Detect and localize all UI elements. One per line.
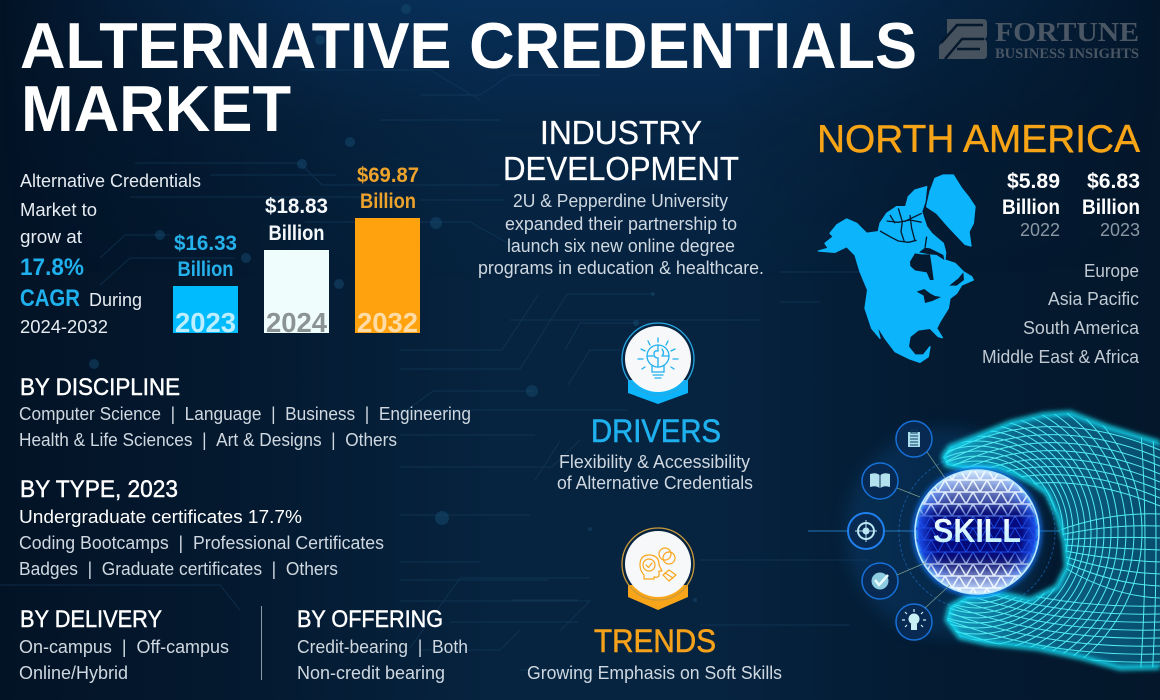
bar: 2032: Billion xyxy=(360,190,416,213)
icon: clipboard xyxy=(896,421,932,457)
trends text xyxy=(527,623,782,683)
logo: Fortune Business Insights: FORTUNE xyxy=(995,17,1139,47)
icon: check mark xyxy=(862,563,898,599)
drivers text: Flexibility & Accessibility xyxy=(559,452,750,472)
title: MARKET xyxy=(21,72,291,145)
industry development: launch six new online degree xyxy=(507,236,735,256)
skill sphere: SKILL xyxy=(933,512,1021,549)
map: North America xyxy=(818,175,975,362)
CAGR text block: During xyxy=(89,290,142,310)
bar: 2024: Billion xyxy=(268,222,324,245)
skill sphere xyxy=(912,467,1042,597)
industry development: 2U & Pepperdine University xyxy=(513,191,728,211)
North America values: 2023 xyxy=(1100,220,1140,240)
icon: target xyxy=(848,513,884,549)
industry development: DEVELOPMENT xyxy=(503,150,739,187)
CAGR text block: 17.8% xyxy=(20,254,84,281)
section: by type: Undergraduate certificates 17.7% xyxy=(19,507,302,527)
trends text: Growing Emphasis on Soft Skills xyxy=(527,663,782,683)
bar: 2032 xyxy=(355,164,420,338)
section: by discipline: Computer Science | Language | Business | Engineering xyxy=(19,404,471,424)
North America values: $6.83 xyxy=(1087,170,1140,193)
industry development xyxy=(478,114,764,278)
bar: 2023 xyxy=(173,232,238,338)
region heading: North America: NORTH AMERICA xyxy=(817,118,1140,161)
bar chart xyxy=(173,164,420,338)
other regions list: South America xyxy=(1023,318,1140,338)
bar: 2032: $69.87 xyxy=(357,164,419,187)
section: by delivery: Online/Hybrid xyxy=(19,663,128,683)
CAGR text block: CAGR xyxy=(20,285,80,312)
section: by discipline: BY DISCIPLINE xyxy=(20,374,180,401)
North America values: Billion xyxy=(1002,196,1060,219)
bar: 2024: 2024 xyxy=(266,307,327,338)
section: by offering: BY OFFERING xyxy=(297,606,443,633)
wireframe hand xyxy=(938,407,1160,674)
industry development: INDUSTRY xyxy=(540,114,702,151)
CAGR text block: Market to xyxy=(20,200,97,220)
title: ALTERNATIVE CREDENTIALS xyxy=(20,9,917,82)
section: by delivery: On-campus | Off-campus xyxy=(19,637,229,657)
North America values xyxy=(1002,170,1140,240)
title xyxy=(20,9,917,145)
icon: trends head badge xyxy=(622,528,694,610)
icon: drivers lightbulb badge xyxy=(622,323,694,404)
bar: 2023: 2023 xyxy=(175,307,236,338)
icon: idea bulb xyxy=(896,604,932,640)
CAGR text block: 2024-2032 xyxy=(20,317,108,337)
North America values: Billion xyxy=(1082,196,1140,219)
other regions list: Europe xyxy=(1084,261,1139,281)
illustration: wireframe hand holding skill sphere xyxy=(808,407,1160,674)
bar: 2024: $18.83 xyxy=(265,195,328,218)
bar: 2024 xyxy=(264,195,329,338)
North America values: 2022 xyxy=(1020,220,1060,240)
industry development: expanded their partnership to xyxy=(505,214,737,234)
CAGR text block: grow at xyxy=(20,227,82,247)
North America values: $5.89 xyxy=(1007,170,1060,193)
drivers text: of Alternative Credentials xyxy=(557,473,753,493)
CAGR text block xyxy=(20,171,201,337)
bar: 2023: $16.33 xyxy=(174,232,237,255)
section: by type: Coding Bootcamps | Professional Certificates xyxy=(19,533,384,553)
section: by type xyxy=(19,476,384,579)
section: by offering xyxy=(297,606,468,683)
bar: 2023: Billion xyxy=(178,258,234,281)
logo: Fortune Business Insights: BUSINESS INSIGHTS xyxy=(995,46,1139,62)
section: by discipline xyxy=(19,374,471,450)
section: by delivery: BY DELIVERY xyxy=(20,606,162,633)
section: by type: Badges | Graduate certificates | Others xyxy=(19,559,338,579)
other regions list xyxy=(982,261,1140,367)
drivers text xyxy=(557,413,753,493)
trends text: TRENDS xyxy=(594,623,716,659)
other regions list: Middle East & Africa xyxy=(982,347,1140,367)
bar: 2032: 2032 xyxy=(357,307,418,338)
drivers text: DRIVERS xyxy=(591,413,721,449)
CAGR text block: Alternative Credentials xyxy=(20,171,201,191)
section: by offering: Non-credit bearing xyxy=(297,663,445,683)
section: by discipline: Health & Life Sciences | Art & Designs | Others xyxy=(19,430,397,450)
section: by delivery xyxy=(19,606,229,683)
section: by type: BY TYPE, 2023 xyxy=(20,476,178,503)
icon: open book xyxy=(862,463,898,499)
logo: Fortune Business Insights xyxy=(939,17,1139,62)
other regions list: Asia Pacific xyxy=(1048,289,1139,309)
section: by offering: Credit-bearing | Both xyxy=(297,637,468,657)
industry development: programs in education & healthcare. xyxy=(478,258,764,278)
